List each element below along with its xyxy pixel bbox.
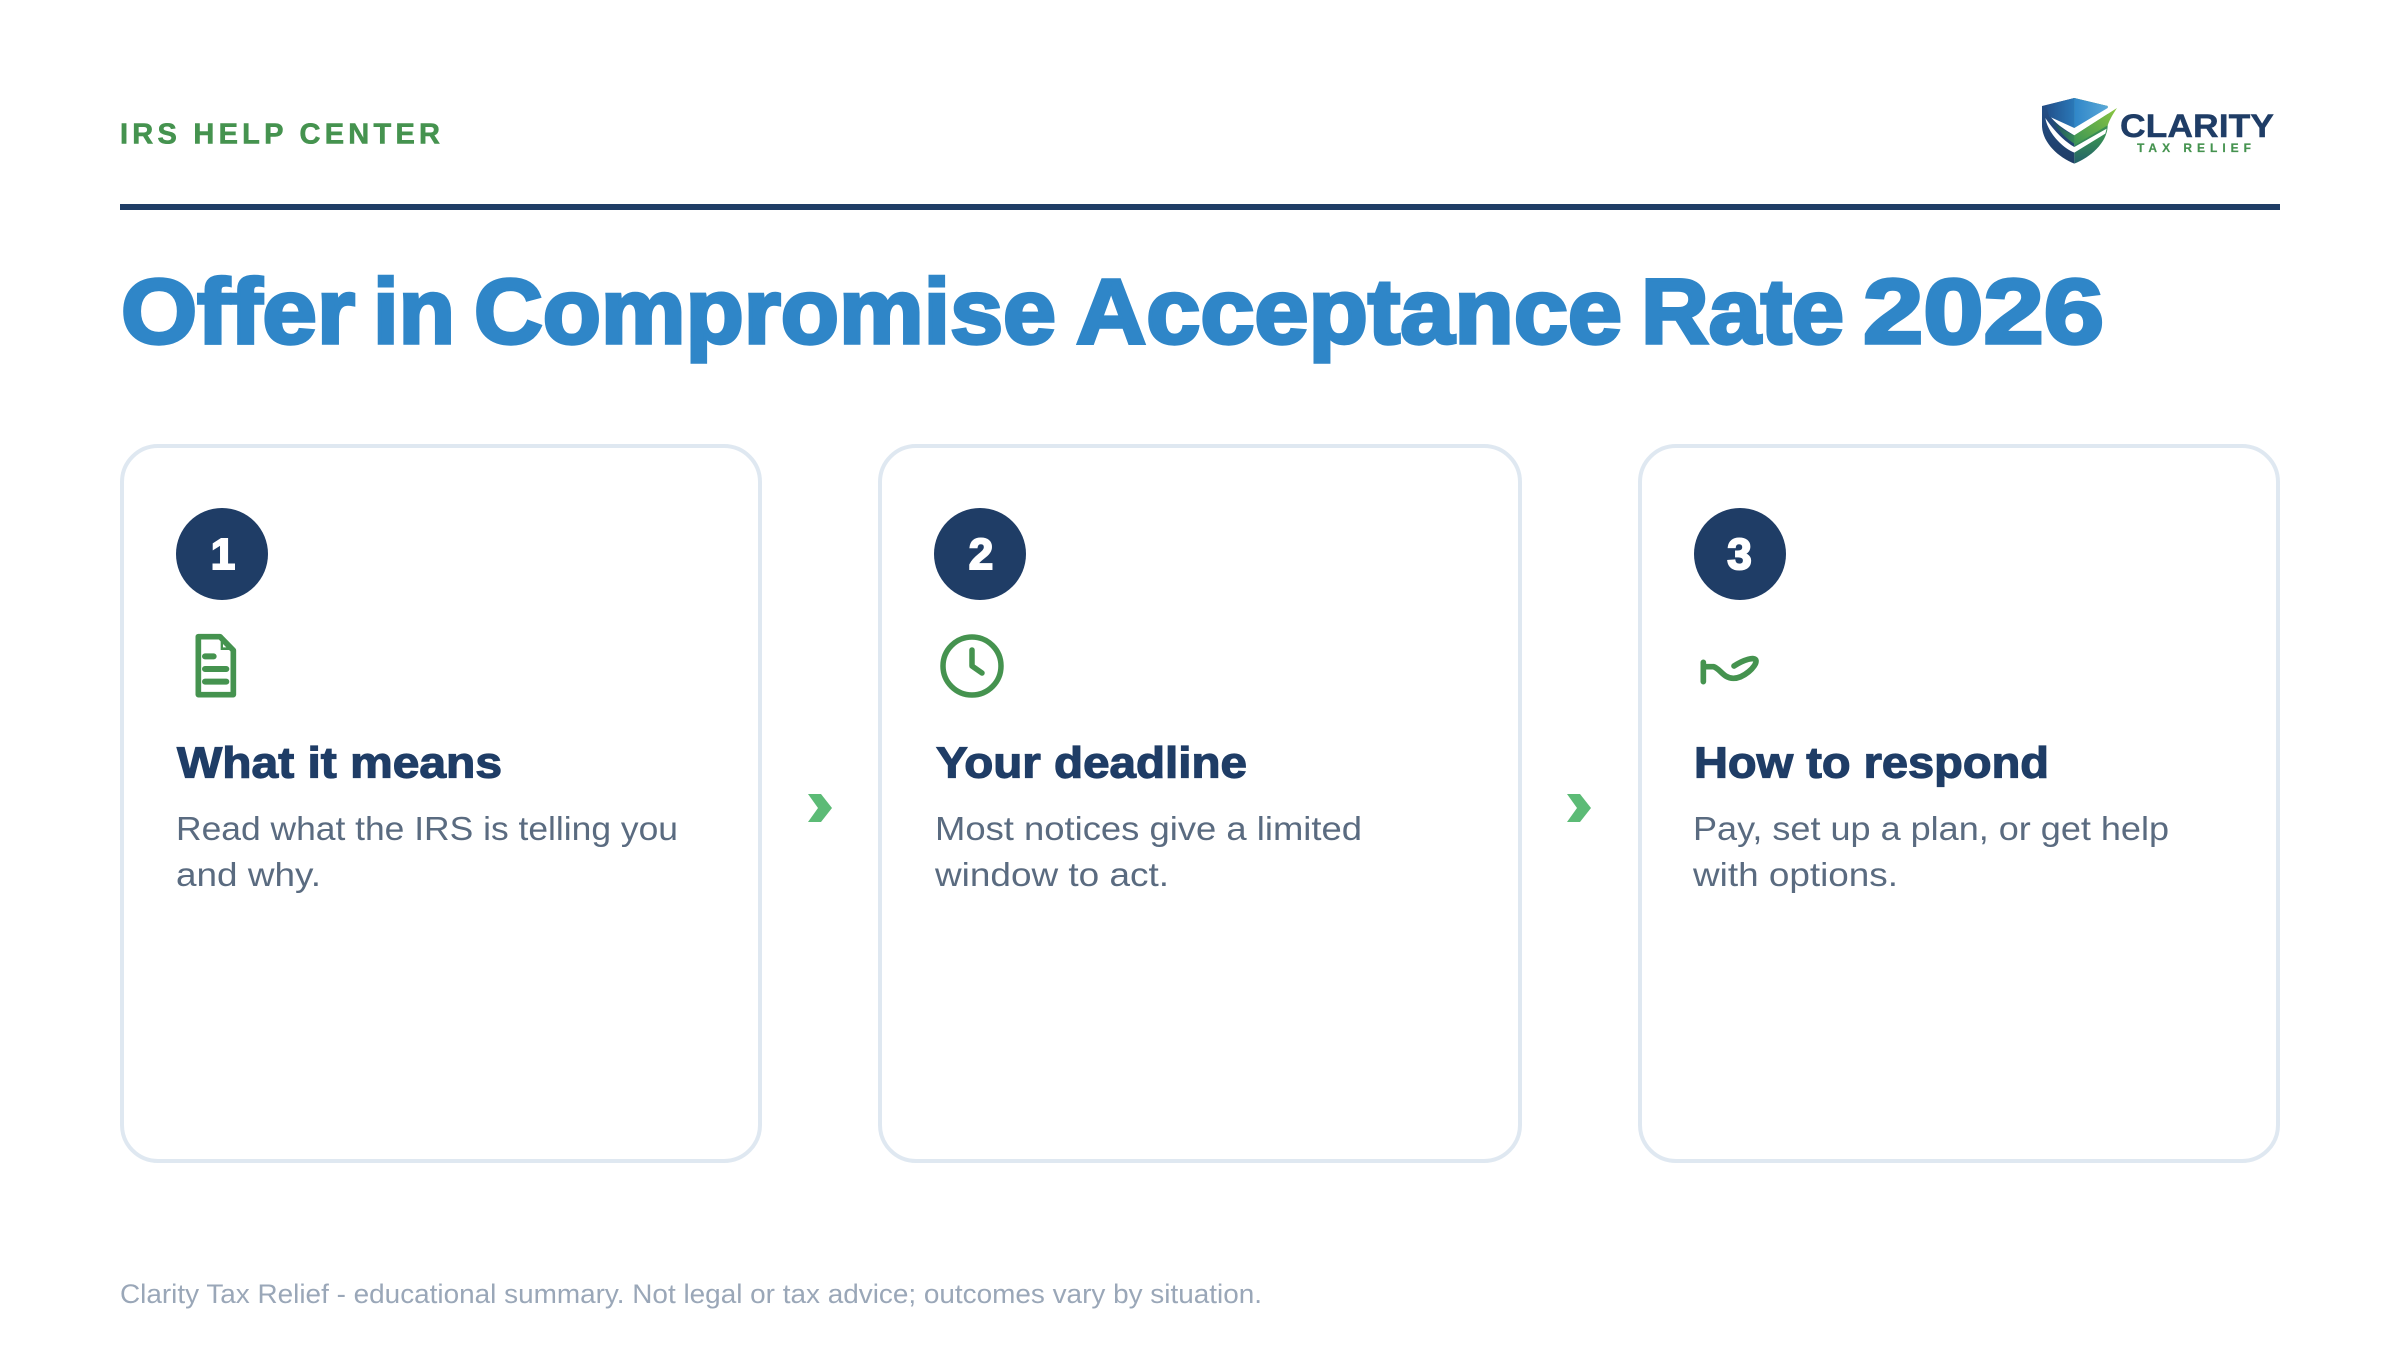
footer disclaimer: Clarity Tax Relief - educational summary. Not legal or tax advice; outcomes vary by situation. — [120, 1279, 1262, 1309]
title: Rate — [1641, 261, 1844, 363]
card body: Most notices give a limited — [935, 810, 1362, 847]
step number badge — [176, 508, 268, 600]
icon: document — [198, 637, 233, 695]
title: Compromise — [474, 261, 1056, 363]
card heading: How to respond — [1694, 738, 2049, 788]
step number badge — [1694, 508, 1786, 600]
panel: step 3 — [1640, 446, 2278, 1161]
icon: handshake squiggle — [1703, 659, 1756, 682]
card heading: What it means — [177, 738, 502, 788]
card outline — [122, 446, 760, 1161]
logo: Clarity Tax Relief — [2042, 98, 2274, 164]
title: Offer — [121, 261, 355, 363]
step number badge: 2 — [969, 530, 993, 579]
card body: Read what the IRS is telling you — [176, 810, 678, 847]
step number badge: 1 — [211, 530, 235, 579]
icon: clock — [943, 637, 1001, 695]
title: 2026 — [1863, 261, 2104, 363]
card body: and why. — [176, 856, 321, 893]
arrow: step 2 to 3 — [1567, 794, 1591, 822]
logo wordmark: CLARITY — [2120, 108, 2274, 144]
step number badge: 3 — [1727, 530, 1752, 579]
card body: Pay, set up a plan, or get help — [1693, 810, 2169, 847]
card body: with options. — [1692, 856, 1898, 893]
panel: step 1 — [122, 446, 760, 1161]
card heading: Your deadline — [936, 738, 1247, 788]
logo tagline: TAX RELIEF — [2137, 141, 2251, 155]
eyebrow heading: IRS HELP CENTER — [120, 118, 440, 150]
card outline — [1640, 446, 2278, 1161]
card body — [176, 810, 678, 893]
card body: window to act. — [934, 856, 1169, 893]
panel: step 2 — [880, 446, 1520, 1161]
header rule — [120, 204, 2280, 210]
arrow: step 1 to 2 — [808, 794, 832, 822]
step number badge — [934, 508, 1026, 600]
card body — [934, 810, 1362, 893]
icon: shield with check — [2042, 98, 2117, 164]
card outline — [880, 446, 1520, 1161]
title: in — [373, 261, 455, 363]
card body — [1692, 810, 2169, 893]
title: Acceptance — [1076, 261, 1622, 363]
